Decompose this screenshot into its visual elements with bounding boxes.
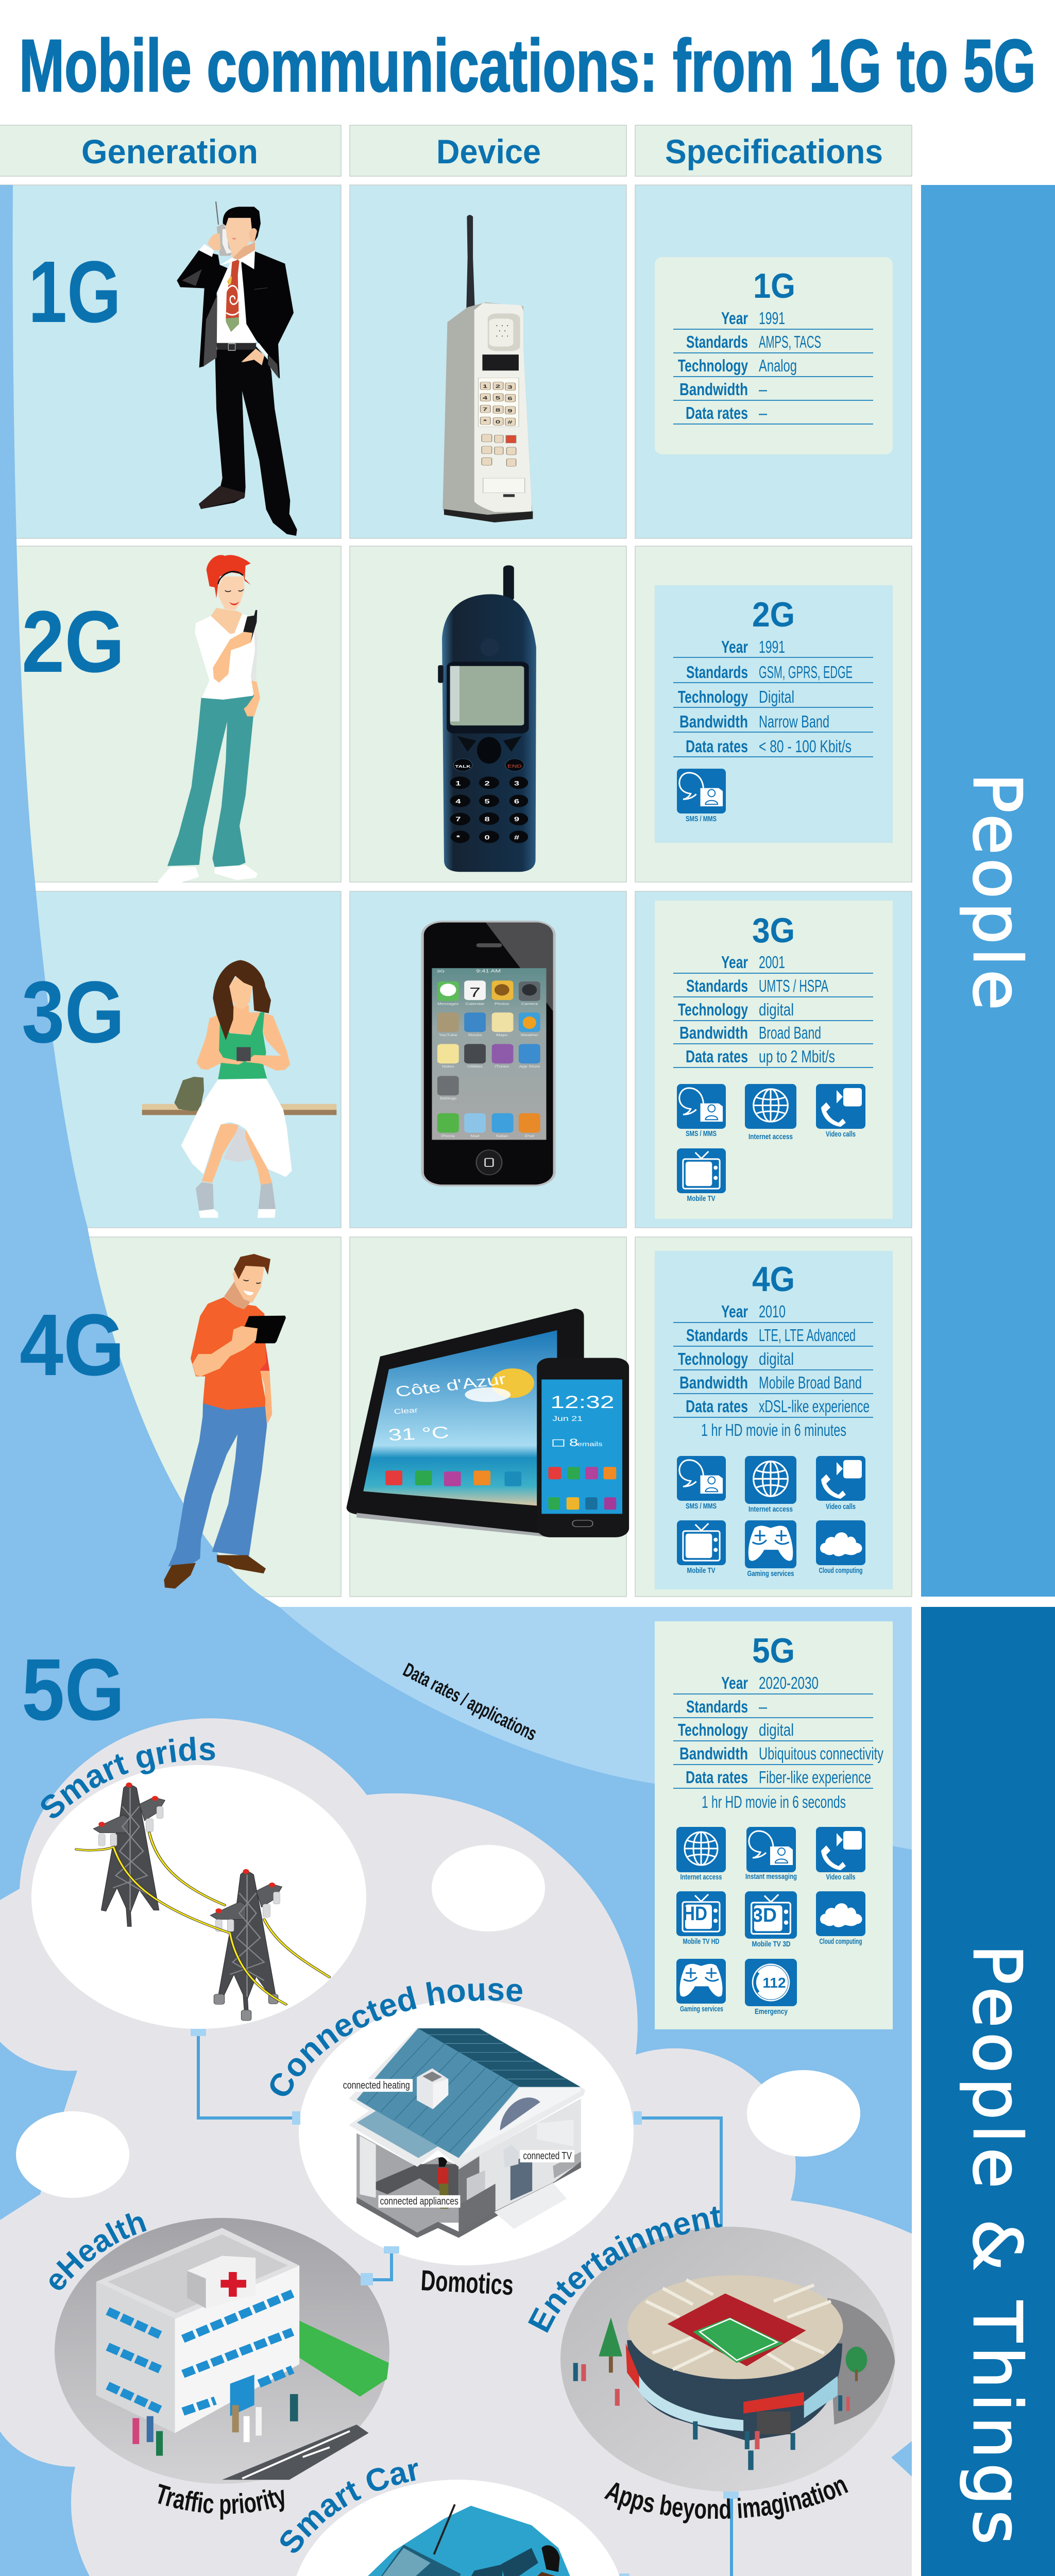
device: touchscreen smartphone: Calendar	[466, 1002, 485, 1006]
spec card: 2G: Data rates	[686, 737, 748, 756]
device: brick phone: 0	[496, 419, 500, 425]
device: 2G handset: 2	[484, 780, 490, 787]
device: touchscreen smartphone: Messages	[437, 1002, 459, 1006]
spec card: 4G: Mobile Broad Band	[759, 1373, 862, 1392]
device: 2G handset: END	[507, 764, 522, 769]
spec card: 5G: Fiber-like experience	[759, 1768, 871, 1787]
spec card: 1G: Standards	[686, 332, 748, 351]
spec card: 4G: LTE, LTE Advanced	[759, 1326, 856, 1345]
spec card: 5G: Gaming services	[680, 2005, 723, 2013]
device: touchscreen smartphone: Camera	[521, 1002, 538, 1006]
spec card: 4G: Internet access	[748, 1505, 793, 1514]
device: tablet and smartphone: 31 °C	[387, 1423, 450, 1444]
device: touchscreen smartphone: App Store	[519, 1065, 540, 1069]
scene captions: Apps beyond imagination	[604, 2479, 848, 2523]
spec card: 2G: < 80 - 100 Kbit/s	[759, 737, 852, 756]
spec card: 5G: Data rates	[686, 1768, 748, 1787]
spec card: 2G: 2G	[752, 595, 795, 634]
device: touchscreen smartphone: Weather	[521, 1033, 538, 1037]
device: tablet and smartphone: Côte d'Azur	[394, 1371, 508, 1400]
spec card: 5G: 112	[762, 1975, 786, 1991]
spec card: 5G: Technology	[678, 1720, 748, 1739]
spec card: 5G: –	[759, 1697, 768, 1716]
device: brick phone	[443, 215, 533, 522]
device: 2G handset: *	[456, 834, 460, 841]
spec card: 2G: SMS / MMS	[686, 815, 717, 823]
spec card: 5G: Ubiquitous connectivity	[759, 1744, 883, 1763]
device: 2G handset: 4	[455, 799, 461, 805]
device: touchscreen smartphone: Settings	[439, 1097, 456, 1100]
spec card: 3G: 2001	[759, 953, 785, 972]
person: woman on bench	[142, 960, 336, 1218]
scene titles	[41, 1736, 722, 2553]
column headers	[0, 125, 912, 176]
device: 2G handset: #	[514, 834, 520, 841]
device: brick phone: 4	[483, 396, 488, 400]
spec card: 5G: Mobile TV 3D	[752, 1940, 791, 1948]
column headers: Device	[436, 132, 541, 171]
spec card: 2G: Standards	[686, 663, 748, 682]
spec card: 5G: Year	[721, 1673, 748, 1692]
spec card: 5G: 2020-2030	[759, 1673, 819, 1692]
spec card: 4G: Cloud computing	[819, 1566, 862, 1575]
spec card: 3G: Data rates	[686, 1047, 748, 1066]
spec card: 4G: digital	[759, 1349, 794, 1368]
spec card: 3G: Broad Band	[759, 1023, 821, 1042]
device: tablet and smartphone: 12:32	[550, 1393, 614, 1412]
device: tablet and smartphone	[347, 1309, 629, 1537]
column headers: Generation	[81, 132, 258, 171]
device: brick phone: 8	[496, 408, 501, 413]
spec card: 5G: Mobile TV HD	[683, 1937, 720, 1946]
spec card: 3G: Video calls	[826, 1130, 856, 1139]
spec card: 5G: Video calls	[826, 1873, 855, 1882]
device: 2G handset: 9	[514, 816, 520, 823]
generation labels: 3G	[22, 963, 125, 1061]
device: 2G handset: 8	[484, 816, 490, 823]
spec card: 4G: 2010	[759, 1302, 786, 1321]
scene captions: Traffic priority	[158, 2483, 284, 2519]
spec card: 4G: Bandwidth	[679, 1373, 748, 1392]
spec card: 4G: 4G	[752, 1260, 795, 1299]
spec card: 1G: Data rates	[686, 403, 748, 422]
device: 2G handset: 3	[514, 780, 520, 787]
spec card: 5G: 1 hr HD movie in 6 seconds	[702, 1792, 846, 1811]
spec card: 4G: Standards	[686, 1326, 748, 1345]
generation labels	[20, 243, 125, 1739]
data rates caption: Data rates / applications	[402, 1663, 536, 1740]
spec card: 1G: 1991	[759, 309, 785, 328]
spec card: 2G: Digital	[759, 687, 794, 706]
scene: connected house: connected appliances	[380, 2195, 458, 2207]
device: touchscreen smartphone: 9:41 AM	[476, 969, 501, 974]
spec card: 5G: 5G	[752, 1631, 795, 1670]
spec card: 3G: Year	[721, 953, 748, 972]
spec card: 5G	[655, 1621, 893, 2029]
people side bar: People	[958, 773, 1035, 1010]
scene: eHealth hospital	[96, 2228, 389, 2480]
people and things side bar: People & Things	[958, 1944, 1035, 2545]
spec card: 5G: HD	[683, 1903, 707, 1925]
device: touchscreen smartphone: 7	[469, 986, 481, 1000]
spec card: 4G: xDSL-like experience	[759, 1397, 870, 1416]
spec card: 3G	[655, 901, 893, 1219]
generation labels: 1G	[28, 243, 121, 341]
device: tablet and smartphone: Jun 21	[552, 1415, 583, 1422]
cloud background	[0, 1718, 922, 2576]
generation labels: 2G	[22, 593, 125, 691]
device: brick phone: 7	[483, 407, 487, 412]
scene captions	[158, 2264, 848, 2523]
spec card: 5G: Emergency	[755, 2007, 788, 2016]
spec card: 2G: 1991	[759, 637, 785, 656]
device: brick phone: 1	[483, 384, 488, 389]
spec card: 4G	[655, 1251, 893, 1589]
spec card: 5G: Internet access	[680, 1873, 722, 1882]
generation labels: 5G	[22, 1641, 125, 1739]
scene: entertainment stadium	[573, 2275, 895, 2470]
spec card: 3G: digital	[759, 1000, 794, 1019]
device: brick phone: 2	[496, 384, 500, 389]
spec card: 5G: Standards	[686, 1697, 748, 1716]
device: touchscreen smartphone: iTunes	[495, 1065, 509, 1069]
spec card: 3G: Mobile TV	[687, 1194, 715, 1203]
spec card: 4G: Video calls	[826, 1502, 856, 1511]
people and things side bar	[921, 1607, 1055, 2576]
spec card: 3G: Internet access	[748, 1132, 793, 1141]
spec card: 3G: 3G	[752, 911, 795, 950]
person: man with tablet	[164, 1254, 286, 1589]
spec card: 2G: Bandwidth	[679, 712, 748, 731]
device: touchscreen smartphone: Stocks	[468, 1033, 482, 1037]
people side bar	[921, 185, 1055, 1597]
spec card: 1G: Year	[721, 309, 748, 328]
device: 2G handset: 5	[484, 799, 490, 805]
scene titles: Entertainment	[528, 2206, 722, 2333]
spec card: 2G	[655, 585, 893, 843]
generation panels	[0, 185, 912, 1597]
spec card: 5G: 3D	[752, 1905, 777, 1926]
spec card: 4G: Data rates	[686, 1397, 748, 1416]
spec card: 3G: SMS / MMS	[686, 1129, 717, 1138]
spec card: 1G: 1G	[753, 266, 795, 306]
column headers: Specifications	[665, 132, 883, 171]
device: touchscreen smartphone: Mail	[471, 1134, 480, 1138]
scene: connected house: connected TV	[523, 2150, 572, 2161]
spec card: 5G: Cloud computing	[819, 1937, 862, 1946]
device: touchscreen smartphone: Notes	[442, 1065, 454, 1069]
scene titles: Connected house	[270, 1981, 522, 2096]
scene: smart grids pylons	[76, 1783, 329, 2021]
device: touchscreen smartphone: Photos	[495, 1002, 509, 1006]
spec card: 3G: Technology	[678, 1000, 748, 1019]
spec card: 5G: digital	[759, 1720, 794, 1739]
spec card: 2G: Technology	[678, 687, 748, 706]
device: touchscreen smartphone: Utilities	[467, 1065, 483, 1069]
device: brick phone: 3	[507, 385, 513, 389]
scene: smart car	[324, 2504, 572, 2576]
device: tablet and smartphone: Clear	[393, 1406, 419, 1416]
device: brick phone: 9	[507, 409, 513, 413]
connectors between scenes	[191, 2029, 739, 2576]
5G background panel	[0, 1607, 912, 2576]
person: man with brick phone	[177, 201, 297, 536]
device: brick phone: 6	[507, 396, 513, 401]
device: 2G handset	[438, 565, 536, 872]
spec card: 5G: Bandwidth	[679, 1744, 748, 1763]
device: touchscreen smartphone: Maps	[496, 1033, 508, 1037]
device: touchscreen smartphone: iPod	[525, 1134, 534, 1138]
device: tablet and smartphone: emails	[577, 1441, 603, 1448]
device: 2G handset: 7	[455, 816, 461, 823]
spec card: 3G: up to 2 Mbit/s	[759, 1047, 835, 1066]
spec card: 3G: UMTS / HSPA	[759, 976, 828, 995]
scene: connected house: connected heating	[343, 2079, 410, 2091]
person: woman with phone	[158, 555, 260, 886]
generation labels: 4G	[20, 1296, 125, 1394]
spec card: 1G: –	[759, 403, 768, 422]
device: 2G handset: TALK	[455, 765, 471, 769]
scene titles: Smart grids	[41, 1736, 215, 1818]
spec card: 1G: –	[759, 380, 768, 399]
device: touchscreen smartphone: Phone	[441, 1134, 455, 1138]
device: brick phone: #	[507, 420, 513, 425]
spec card: 2G: Narrow Band	[759, 712, 829, 731]
device: 2G handset: 6	[514, 799, 520, 805]
spec card: 3G: Standards	[686, 976, 748, 995]
device: 2G handset: 1	[455, 780, 461, 787]
spec card: 4G: SMS / MMS	[686, 1502, 717, 1511]
device: tablet and smartphone: 8	[569, 1436, 578, 1449]
spec card: 1G: AMPS, TACS	[759, 332, 821, 351]
scene titles: eHealth	[49, 2213, 147, 2290]
spec card: 4G: Gaming services	[747, 1569, 794, 1578]
spec card: 4G: Mobile TV	[687, 1566, 715, 1575]
spec card: 2G: GSM, GPRS, EDGE	[759, 663, 853, 682]
spec card: 1G	[655, 257, 893, 454]
device: 2G handset: 0	[484, 834, 490, 841]
device: touchscreen smartphone: YouTube	[439, 1033, 457, 1037]
scene titles: Smart Car	[280, 2463, 418, 2553]
spec card: 1G: Bandwidth	[679, 380, 748, 399]
spec card: 2G: Year	[721, 637, 748, 656]
device: touchscreen smartphone: Safari	[496, 1134, 508, 1138]
device: brick phone: 5	[496, 396, 501, 400]
spec card: 4G: 1 hr HD movie in 6 minutes	[701, 1420, 846, 1439]
spec card: 1G: Analog	[759, 356, 797, 375]
spec card: 4G: Technology	[678, 1349, 748, 1368]
spec card: 3G: Bandwidth	[679, 1023, 748, 1042]
spec card: 5G: Instant messaging	[745, 1872, 797, 1881]
device: touchscreen smartphone	[421, 921, 556, 1187]
scene: connected house	[339, 2027, 585, 2238]
spec card: 1G: Technology	[678, 356, 748, 375]
spec card: 4G: Year	[721, 1302, 748, 1321]
scene captions: Domotics	[420, 2264, 514, 2301]
device: brick phone: *	[483, 419, 487, 424]
device: touchscreen smartphone: 3G	[437, 970, 445, 974]
